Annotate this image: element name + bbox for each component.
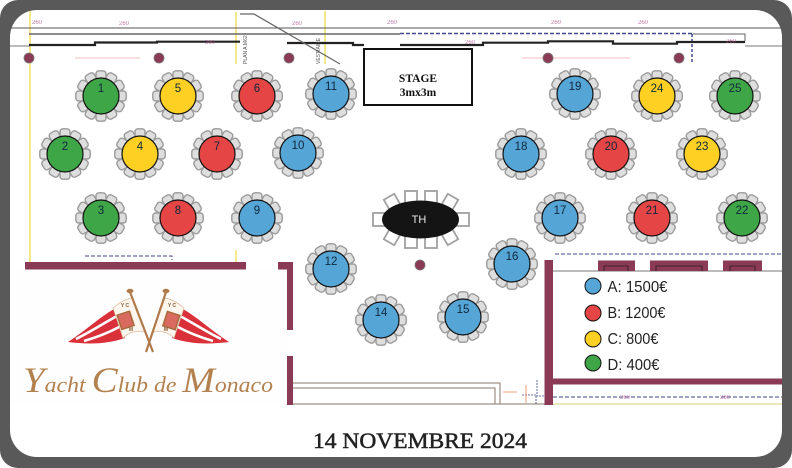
structural walls (25, 260, 782, 405)
table 14: 14 (375, 307, 388, 319)
table 19: 19 (569, 81, 581, 93)
legend item C: C: 800€ (608, 331, 659, 348)
table 16 (487, 239, 537, 289)
table 12: 12 (325, 256, 337, 268)
table 3 (76, 193, 126, 243)
floor plan background lines: 260 (119, 21, 130, 27)
head table TH: TH (412, 214, 426, 226)
table 22: 22 (736, 205, 748, 217)
table 15 (438, 292, 488, 342)
stage (364, 49, 472, 105)
left flag (68, 298, 145, 343)
date: 14 NOVEMBRE 2024 (313, 428, 527, 453)
table 23 (677, 129, 727, 179)
table 2 (40, 129, 90, 179)
stage: 3mx3m (400, 87, 437, 99)
table 18: 18 (515, 141, 527, 153)
table 21: 21 (646, 205, 658, 217)
legend item A: A: 1500€ (608, 279, 668, 296)
table 4 (115, 129, 165, 179)
table 10: 10 (292, 140, 304, 152)
stage: STAGE (399, 73, 437, 85)
table 20 (586, 129, 636, 179)
head table TH (373, 191, 469, 248)
right flag: Y C (168, 303, 177, 309)
table 6: 6 (254, 83, 260, 95)
table 22 (717, 193, 767, 243)
floor plan background lines: 260 (205, 40, 216, 46)
legend (585, 278, 668, 374)
table 5 (153, 71, 203, 121)
table 11 (306, 69, 356, 119)
table 8 (153, 193, 203, 243)
table 20: 20 (605, 141, 617, 153)
table 1 (76, 71, 126, 121)
table 19 (550, 69, 600, 119)
table 12 (306, 244, 356, 294)
table 1: 1 (98, 83, 104, 95)
table 8: 8 (175, 205, 181, 217)
logo panel: Yacht Club de Monaco (10, 270, 287, 405)
table 21 (627, 193, 677, 243)
floor plan background lines: 260 (620, 395, 631, 401)
floor plan background lines: VESTIAIRE (316, 37, 322, 64)
floor plan background lines: 260 (638, 20, 649, 26)
floor plan background lines: 260 (720, 395, 731, 401)
table 11: 11 (325, 81, 337, 93)
table 7 (192, 129, 242, 179)
floor plan background lines: 260 (551, 20, 562, 26)
table 2: 2 (62, 141, 68, 153)
floor plan background lines: 260 (726, 39, 737, 45)
left flag: M (129, 327, 133, 333)
right flag (152, 298, 229, 343)
columns (24, 53, 684, 270)
table 24 (632, 71, 682, 121)
table 3: 3 (98, 205, 104, 217)
floor plan background lines: PLAN A.M62 (243, 35, 249, 64)
legend item B: B: 1200€ (608, 305, 666, 322)
table 14 (356, 295, 406, 345)
right flag: M (164, 327, 168, 333)
table 7: 7 (214, 141, 220, 153)
table 15: 15 (457, 304, 469, 316)
table 5: 5 (175, 83, 181, 95)
table 10 (273, 128, 323, 178)
table 23: 23 (696, 141, 708, 153)
floor plan background lines: 260 (32, 20, 43, 26)
floor plan background lines: 260 (465, 40, 476, 46)
floor plan background lines: 260 (292, 21, 303, 27)
crossed flag poles (126, 289, 170, 352)
table 24: 24 (651, 83, 664, 95)
table 9: 9 (254, 205, 260, 217)
table 9 (232, 193, 282, 243)
table 16: 16 (506, 251, 518, 263)
legend item D: D: 400€ (608, 357, 660, 374)
club name: Yacht Club de Monaco (23, 360, 273, 400)
table 4: 4 (137, 141, 144, 153)
table 17 (535, 193, 585, 243)
table 25 (710, 71, 760, 121)
left flag: Y C (121, 303, 130, 309)
table 17: 17 (554, 205, 566, 217)
table 18 (496, 129, 546, 179)
floor plan background lines: 260 (387, 20, 398, 26)
table 25: 25 (729, 83, 741, 95)
table 6 (232, 71, 282, 121)
